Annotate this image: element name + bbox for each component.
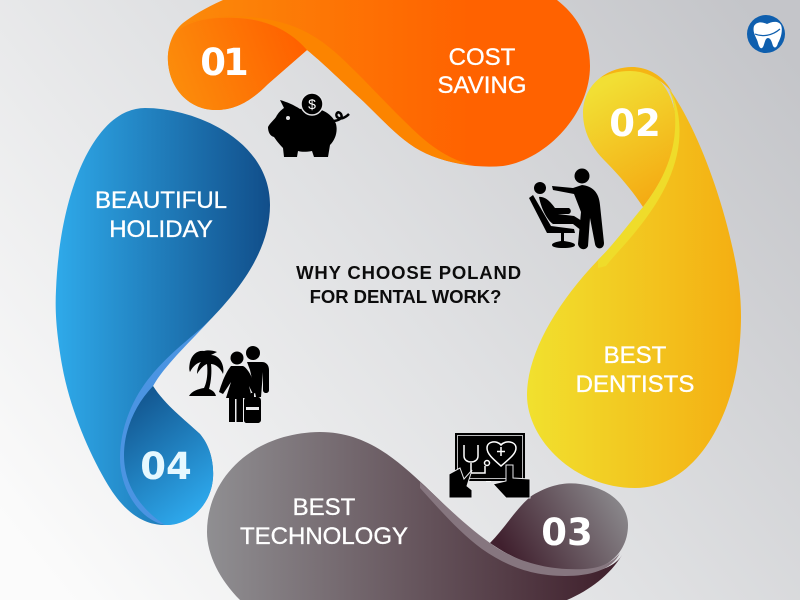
panel: 03 best technology xyxy=(207,432,628,600)
panel: 01 cost saving xyxy=(168,0,590,167)
label: best dentists: DENTISTS xyxy=(576,371,694,398)
label: best technology: BEST xyxy=(293,494,356,521)
label: cost saving: COST xyxy=(449,44,516,71)
icon: tablet with stethoscope and heart xyxy=(449,433,530,498)
title: WHY CHOOSE POLAND xyxy=(296,262,522,283)
icon: tooth logo xyxy=(747,15,785,53)
number 03: 03 xyxy=(541,511,593,554)
icon: piggy bank xyxy=(268,93,349,157)
panel: 04 beautiful holiday xyxy=(56,108,270,525)
label: cost saving: SAVING xyxy=(438,72,526,99)
icon: dentist and patient xyxy=(529,168,604,249)
icon: piggy bank: $ xyxy=(308,96,316,112)
number 04: 04 xyxy=(140,445,192,488)
title: FOR DENTAL WORK? xyxy=(310,286,501,307)
panel: 02 best dentists xyxy=(527,67,741,488)
number 02: 02 xyxy=(609,102,661,145)
icon: travellers with palm tree xyxy=(189,346,269,423)
number 01: 01 xyxy=(200,41,247,84)
label: beautiful holiday: HOLIDAY xyxy=(109,216,213,243)
label: best dentists: BEST xyxy=(604,342,667,369)
label: best technology: TECHNOLOGY xyxy=(240,523,408,550)
label: beautiful holiday: BEAUTIFUL xyxy=(95,187,227,214)
